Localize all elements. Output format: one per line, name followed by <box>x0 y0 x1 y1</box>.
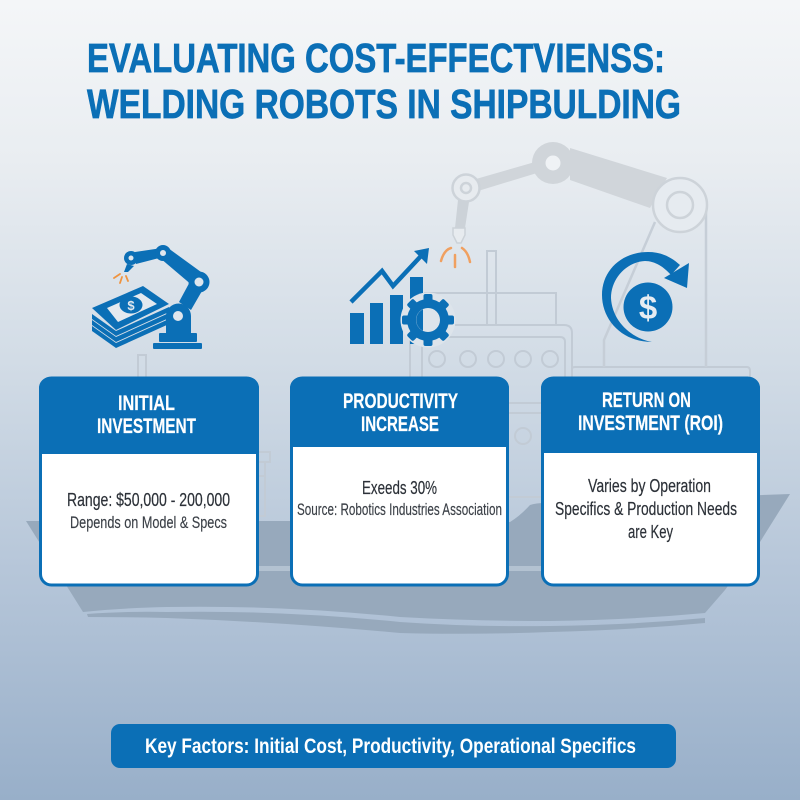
body text <box>67 489 230 532</box>
body text <box>555 475 737 542</box>
heading <box>578 389 723 435</box>
card header <box>290 377 509 447</box>
icon: dollar return arrow: $ <box>639 289 657 326</box>
sparks <box>114 274 128 283</box>
robot arm <box>124 245 210 349</box>
footer banner: key factors <box>111 724 676 768</box>
card header <box>39 377 259 454</box>
cash stack <box>92 286 169 348</box>
card header <box>541 377 760 453</box>
icon: cash stack with robot arm <box>92 245 210 349</box>
heading: INCREASE <box>361 413 439 436</box>
icon: dollar return arrow <box>602 252 689 342</box>
body text: Exeeds 30% <box>362 477 437 498</box>
hull stripes <box>87 566 705 634</box>
body text: Source: Robotics Industries Association <box>297 500 502 519</box>
body text: Varies by Operation <box>588 475 711 496</box>
body text: Range: $50,000 - 200,000 <box>67 489 230 510</box>
icon: cash stack with robot arm: $ <box>127 298 135 313</box>
title <box>87 35 681 127</box>
welding sparks <box>441 248 470 267</box>
title: WELDING ROBOTS IN SHIPBULDING <box>87 81 681 127</box>
panel: return on investment <box>541 377 760 585</box>
body text: Specifics & Production Needs <box>555 498 737 519</box>
heading: INITIAL <box>118 392 175 415</box>
heading: RETURN ON <box>602 389 691 412</box>
body text: Depends on Model & Specs <box>70 513 227 532</box>
icon: growth chart with gear <box>350 248 456 348</box>
heading: INVESTMENT (ROI) <box>578 412 723 435</box>
footer banner: key factors: Key Factors: Initial Cost, Productivity, Operational Specifics <box>145 735 636 758</box>
ship hull <box>26 494 790 621</box>
gear <box>400 292 456 348</box>
robot arm <box>452 142 707 367</box>
body text: are Key <box>628 521 674 542</box>
background illustration: ship and welding robot <box>26 142 790 634</box>
panel: productivity increase <box>290 377 509 585</box>
heading: PRODUCTIVITY <box>343 390 458 413</box>
heading <box>343 390 458 436</box>
body text <box>297 477 502 519</box>
heading <box>97 392 196 438</box>
panel: initial investment <box>39 377 259 585</box>
ship superstructure <box>138 251 750 516</box>
heading: INVESTMENT <box>97 415 196 438</box>
title: EVALUATING COST-EFFECTVIENSS: <box>87 35 665 81</box>
